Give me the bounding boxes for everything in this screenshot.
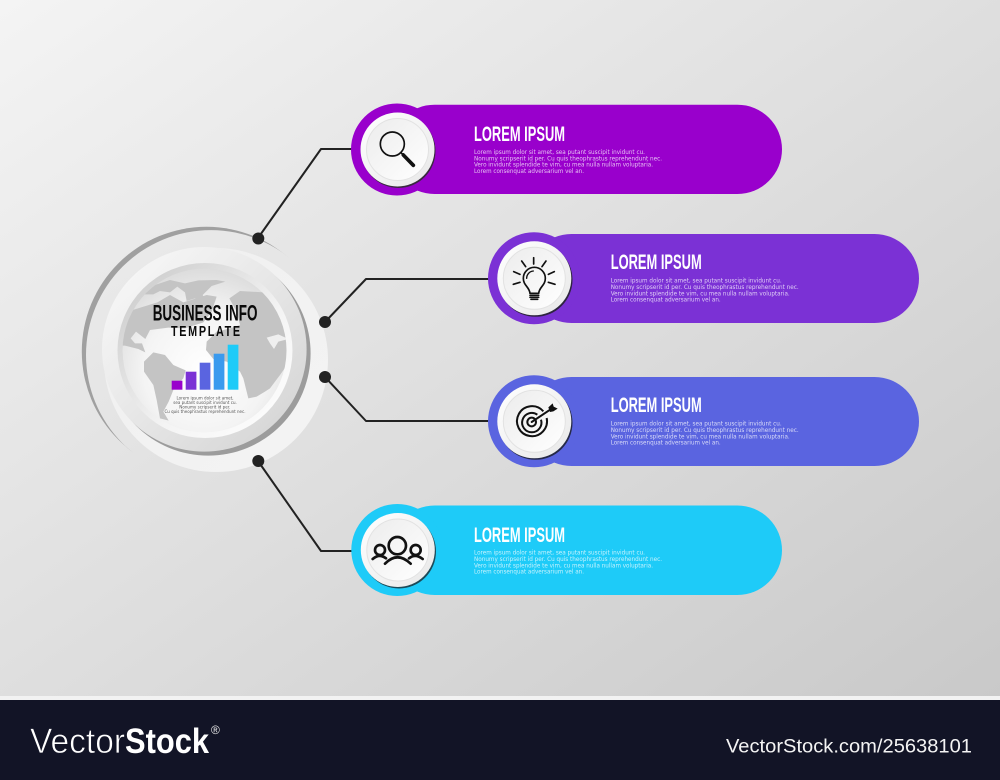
emblem caption: [164, 396, 246, 414]
icon: people: [373, 537, 423, 564]
body text: [474, 150, 662, 175]
pill: [527, 234, 919, 323]
footer id: VectorStock.com/25638101: [726, 736, 972, 758]
inner disc: [102, 247, 307, 452]
body text: [474, 551, 662, 576]
heading: LOREM IPSUM: [611, 394, 702, 417]
emblem subtitle: TEMPLATE: [171, 322, 240, 339]
body text: Lorem consenquat adversarium vel an.: [474, 169, 584, 175]
body text: Vero invidunt splendide te vim, cu mea nulla nullam voluptaria.: [474, 563, 653, 569]
body text: Lorem consenquat adversarium vel an.: [474, 570, 584, 576]
pill: [390, 105, 782, 194]
panel: item 2: [488, 232, 919, 324]
body text: Nonumy scripserit id per. Cu quis theophrastus reprehendunt nec.: [611, 285, 799, 291]
central globe emblem: [82, 227, 331, 476]
body text: Vero invidunt splendide te vim, cu mea nulla nullam voluptaria.: [474, 163, 653, 169]
icon: target: [517, 403, 558, 436]
badge: [488, 232, 580, 324]
body text: Lorem ipsum dolor sit amet, sea putant suscipit invidunt cu.: [611, 422, 782, 428]
body text: Lorem ipsum dolor sit amet, sea putant suscipit invidunt cu.: [474, 150, 645, 156]
outer crescent: [82, 226, 286, 451]
emblem caption: sea putant suscipit invidunt cu.: [173, 400, 237, 405]
panel: item 3: [488, 375, 919, 467]
badge: [488, 375, 580, 467]
emblem caption: Nonumy scripserit id per.: [179, 404, 230, 410]
heading: LOREM IPSUM: [474, 122, 565, 146]
light disc: [104, 248, 328, 472]
globe with continents: [122, 275, 286, 422]
panel: item 1: [351, 104, 782, 196]
body text: Nonumy scripserit id per. Cu quis theophrastus reprehendunt nec.: [474, 557, 662, 563]
icon: magnifier: [380, 132, 413, 165]
globe ring: [118, 263, 292, 438]
body text: Nonumy scripserit id per. Cu quis theophrastus reprehendunt nec.: [474, 156, 662, 162]
emblem title: BUSINESS INFO: [153, 302, 257, 327]
connector lines: [258, 149, 489, 551]
body text: [611, 422, 799, 447]
pill: [527, 377, 919, 466]
body text: Nonumy scripserit id per. Cu quis theophrastus reprehendunt nec.: [611, 428, 799, 434]
heading: LOREM IPSUM: [474, 523, 565, 546]
pill: [390, 506, 782, 595]
icon: light bulb: [513, 258, 555, 299]
body text: Lorem consenquat adversarium vel an.: [611, 441, 721, 447]
heading: LOREM IPSUM: [611, 251, 702, 274]
panel: item 4: [351, 504, 782, 596]
body text: Lorem ipsum dolor sit amet, sea putant suscipit invidunt cu.: [611, 279, 782, 285]
badge: [351, 104, 443, 196]
body text: [611, 279, 799, 304]
emblem bar chart: [172, 345, 238, 390]
footer strip: [0, 696, 1000, 780]
registered mark: ®: [211, 723, 220, 737]
badge: [351, 504, 443, 596]
connector dots: [252, 232, 331, 467]
inner crescent: [106, 251, 311, 456]
body text: Lorem ipsum dolor sit amet, sea putant suscipit invidunt cu.: [474, 551, 645, 557]
body text: Vero invidunt splendide te vim, cu mea nulla nullam voluptaria.: [611, 434, 790, 440]
footer logo: VectorStock: [30, 722, 209, 761]
emblem caption: Lorem ipsum dolor sit amet,: [176, 396, 234, 400]
body text: Lorem consenquat adversarium vel an.: [611, 298, 721, 304]
emblem caption: Cu quis theophrastus reprehendunt nec.: [164, 409, 246, 414]
body text: Vero invidunt splendide te vim, cu mea nulla nullam voluptaria.: [611, 291, 790, 297]
